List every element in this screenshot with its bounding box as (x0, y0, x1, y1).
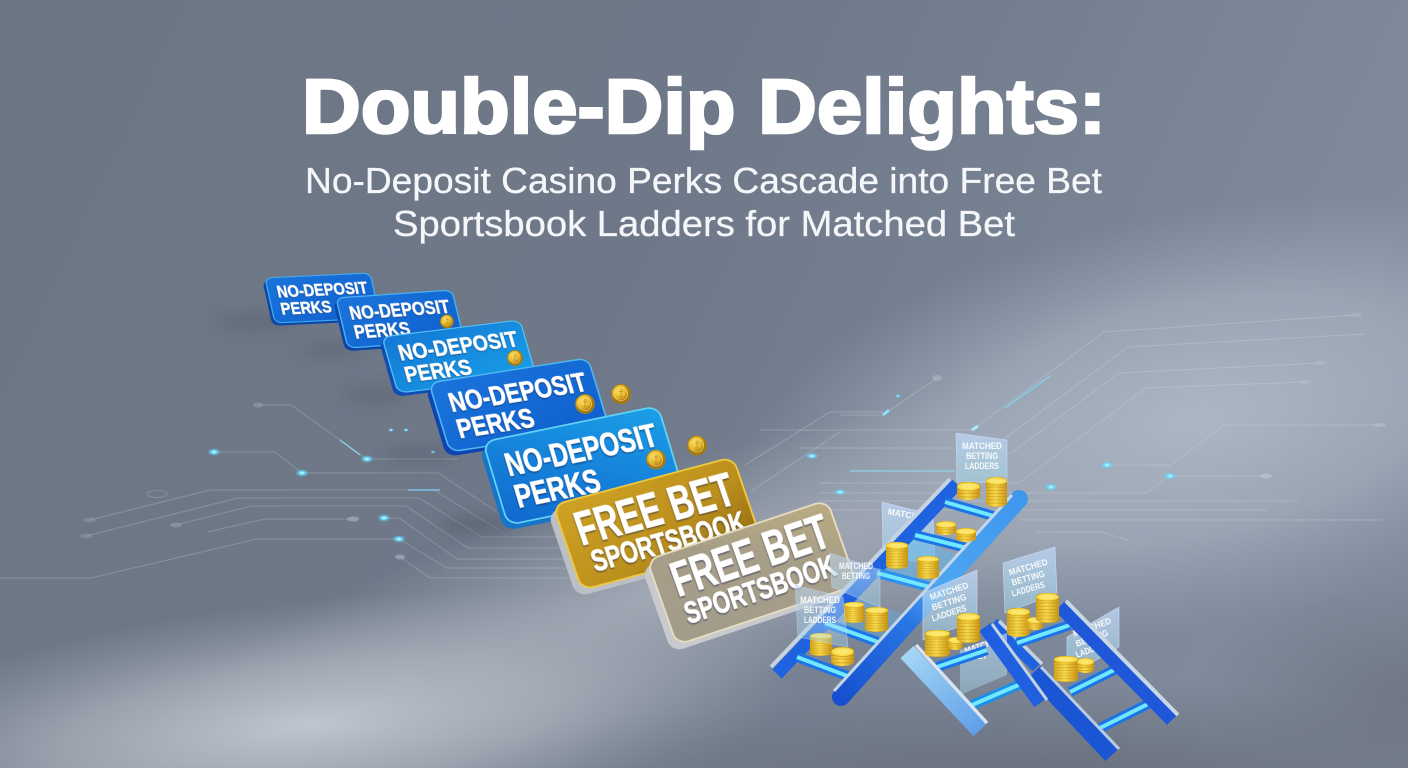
sign: third (830, 553, 880, 607)
card: free bet gold: FREE BET (568, 463, 742, 556)
sign: centre: BETTING (930, 592, 968, 612)
title: Double-Dip Delights: (302, 64, 1106, 150)
card: no-deposit perks 5 (478, 406, 684, 531)
sign: top: LADDERS (965, 461, 999, 471)
sign: fourth (795, 585, 848, 647)
sign: fourth: BETTING (804, 605, 836, 615)
card: no-deposit perks 4: NO-DEPOSIT (445, 368, 591, 418)
subtitle: No-Deposit Casino Perks Cascade into Free Bet (305, 160, 1102, 201)
card: free bet silver: FREE BET (664, 504, 837, 607)
glass step panels (822, 535, 958, 645)
card: no-deposit perks 1: PERKS (279, 297, 333, 319)
sign: fourth: MATCHED (800, 595, 840, 605)
card: no-deposit perks 3 (378, 320, 537, 397)
icon: falling coin 2 (688, 436, 706, 455)
sign: second: BET (905, 521, 919, 531)
right rail (1060, 601, 1178, 720)
coin stacks (925, 613, 980, 657)
coin stacks (1007, 593, 1094, 682)
sign: right lower: LADDERS (1074, 639, 1110, 660)
rungs (1017, 625, 1150, 728)
icon: coin 1 (440, 315, 454, 328)
sign: right upper: MATCHED (1008, 557, 1049, 577)
card: no-deposit perks 5: NO-DEPOSIT (501, 418, 662, 484)
card: no-deposit perks 2: NO-DEPOSIT (347, 297, 452, 324)
upper rail back (993, 621, 1042, 667)
sign: centre: MATCHED (929, 580, 970, 602)
left rail (907, 645, 987, 730)
circuit traces right (745, 312, 1386, 541)
sign: third: MATCHED (839, 561, 873, 571)
icon: coin 3 (576, 394, 594, 414)
icon: falling coin 1 (612, 384, 630, 404)
rungs (797, 502, 997, 677)
sign: low: MATCHED (963, 634, 1003, 656)
circuit traces left (0, 402, 600, 578)
card: no-deposit perks 2: PERKS (352, 319, 413, 343)
sign: right upper (1003, 547, 1057, 613)
card: free bet gold (546, 457, 764, 597)
sign: low (960, 633, 1007, 695)
rungs (937, 650, 1023, 705)
ladder: right ladder (993, 547, 1178, 755)
ladder: centre ladder (907, 570, 1047, 730)
sign: second: MATCHED (887, 506, 931, 524)
coin stacks (810, 477, 1007, 666)
left rail (771, 479, 957, 674)
card: free bet gold: SPORTSBOOK (586, 505, 751, 578)
sign: right lower (1067, 607, 1119, 677)
sign: top: BETTING (966, 451, 998, 461)
right rail (834, 495, 1019, 697)
icon: coin 2 (507, 350, 523, 366)
card: no-deposit perks 4: PERKS (453, 404, 538, 444)
sign: top (956, 433, 1007, 482)
ladder: upper long ladder (771, 433, 1019, 697)
sign: right upper: BETTING (1010, 569, 1046, 588)
card: no-deposit perks 1: NO-DEPOSIT (275, 278, 370, 301)
subtitle (305, 160, 1102, 244)
sign: second (882, 502, 935, 567)
sign: low: BET (973, 651, 987, 661)
subtitle: Sportsbook Ladders for Matched Bet (393, 203, 1015, 244)
left rail (1034, 667, 1119, 755)
card shadows (215, 316, 518, 533)
sign: right upper: LADDERS (1010, 580, 1046, 599)
card: no-deposit perks 3: PERKS (402, 356, 475, 387)
card: no-deposit perks 1 (262, 273, 381, 326)
sign: centre (923, 570, 977, 640)
card: no-deposit perks 2 (333, 290, 465, 351)
sign: top: MATCHED (962, 441, 1002, 451)
sign: fourth: LADDERS (804, 615, 836, 625)
card: free bet silver (640, 500, 859, 652)
icon: coin 4 (646, 450, 666, 469)
sign: right lower: MATCHED (1071, 615, 1113, 639)
sign: third: BETTING (842, 571, 870, 581)
card: no-deposit perks 4 (424, 358, 610, 457)
sign: centre: LADDERS (930, 603, 968, 623)
card: no-deposit perks 5: PERKS (510, 463, 605, 515)
sign: right lower: BETTING (1074, 628, 1110, 649)
card: no-deposit perks 3: NO-DEPOSIT (396, 328, 521, 366)
right rail (985, 624, 1047, 703)
card: free bet silver: SPORTSBOOK (680, 548, 841, 630)
